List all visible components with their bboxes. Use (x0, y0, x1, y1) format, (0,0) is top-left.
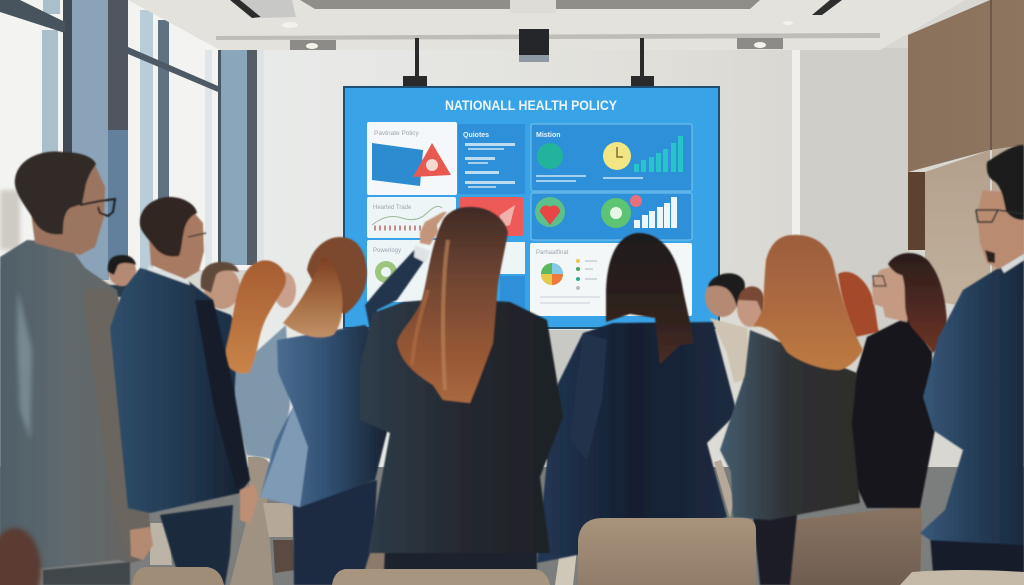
chair: right (788, 506, 922, 585)
person: man in grey suit far left (0, 152, 153, 585)
ceiling (128, 0, 965, 50)
panel: mission charts bottom (531, 193, 692, 240)
hazy city view (0, 190, 20, 250)
trousers (753, 515, 797, 585)
background audience (108, 255, 879, 460)
jacket highlight (17, 290, 32, 440)
chair: mid left second (263, 503, 293, 537)
projector and screen mounts (403, 29, 654, 87)
neck and face (30, 163, 105, 255)
person: redhead woman left (225, 260, 296, 460)
neck and face (148, 209, 204, 279)
raised sleeve (365, 247, 427, 340)
chair: far right (900, 570, 1024, 585)
collar (148, 266, 190, 285)
person: woman pointing with ponytail (260, 212, 447, 585)
shoes and legs (273, 540, 295, 573)
trousers (43, 562, 130, 585)
chairs in the foreground (132, 518, 1024, 585)
right wall section (800, 48, 910, 348)
trousers (293, 480, 377, 585)
chairs behind the standing people (150, 457, 922, 585)
head hair (307, 237, 367, 314)
glasses (188, 233, 206, 237)
right sleeve (85, 288, 151, 563)
hand pointing (420, 212, 447, 245)
long hair (397, 207, 508, 403)
panel: mission charts top (531, 124, 692, 191)
panel: red alert (460, 197, 523, 236)
sleeve (195, 300, 250, 488)
trousers (930, 535, 1024, 585)
hand (240, 484, 258, 524)
hair (987, 145, 1024, 220)
ponytail (283, 258, 342, 337)
person: man in navy suit far right (920, 145, 1024, 585)
wall below screen (548, 330, 588, 467)
chair: far left (132, 567, 224, 585)
flared jacket edge (260, 407, 308, 507)
panel: powerbiology: Powerlogy (373, 248, 401, 254)
panel: policy card: Pavtnate Policy (374, 130, 420, 137)
floor (0, 467, 1024, 585)
hair highlights (443, 240, 448, 390)
person: distant man left (108, 255, 138, 297)
hair (140, 197, 197, 256)
jacket (110, 268, 250, 513)
screen title: NATIONALL HEALTH POLICY (445, 97, 618, 113)
back wall (258, 50, 910, 470)
panel: outline list (458, 124, 525, 194)
panel: powerbiology (367, 240, 457, 302)
long dark hair (606, 233, 694, 364)
panel: policy card (367, 122, 457, 195)
face and neck (977, 190, 1024, 269)
chair: center right small (555, 460, 587, 585)
panel: performance card with pie: Parhaatfinat (536, 250, 569, 256)
trousers (384, 548, 537, 572)
cuff (414, 245, 430, 263)
person: man behind (201, 262, 241, 425)
person: far right redhead (838, 272, 879, 337)
panel: health trends: Hearted Trade (373, 205, 412, 211)
panel: outline list: Quiotes (463, 132, 489, 139)
presentation screen (343, 86, 720, 329)
jacket (360, 298, 563, 553)
long hair (753, 235, 863, 370)
glasses (976, 210, 1024, 222)
glasses (80, 199, 115, 216)
person: woman in center with long hair (360, 207, 563, 572)
chair: grey near man (150, 523, 172, 565)
panel: performance card with pie (530, 243, 692, 316)
person: woman grey blazer with auburn hair (720, 235, 863, 585)
person: man in navy suit (110, 197, 258, 585)
chair: mid left back (230, 457, 273, 585)
chair: between legs (362, 544, 388, 572)
panel: mission charts top: Mistion (536, 132, 560, 139)
panel: side cards (500, 242, 525, 310)
person: woman in navy blazer dark hair (530, 233, 737, 563)
wood panel wall on the right (908, 0, 1024, 310)
foreground blurred head corner (0, 528, 41, 585)
windows on the left (0, 0, 264, 280)
beard (985, 250, 995, 263)
jacket (720, 330, 860, 520)
trousers (160, 505, 233, 585)
sleeve left (570, 333, 607, 460)
jacket (260, 325, 390, 507)
jacket (920, 257, 1024, 545)
panel: health trends (367, 197, 456, 238)
hair (15, 152, 96, 234)
chair: center (578, 518, 756, 585)
chair: right of blazer woman (714, 460, 734, 518)
chair: front center (332, 569, 550, 585)
person: right background man (705, 273, 764, 383)
hand (130, 527, 153, 560)
shirt collar (1000, 252, 1024, 273)
person: woman in black far right (843, 253, 947, 508)
